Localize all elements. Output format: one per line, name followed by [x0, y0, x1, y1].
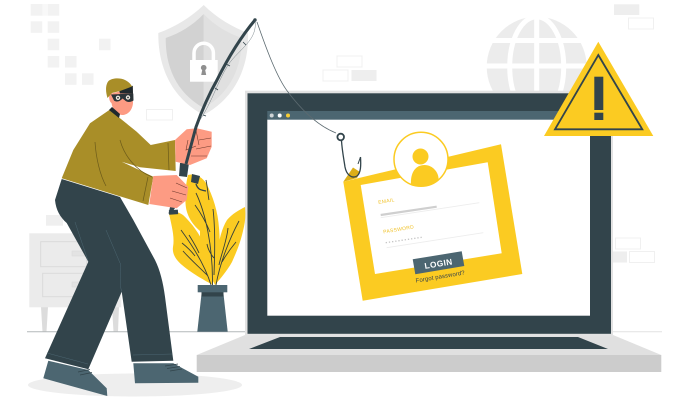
card white panel: [361, 162, 502, 274]
ground shadow: [28, 374, 242, 396]
lower hand: [149, 175, 188, 208]
rod handle: [179, 163, 189, 177]
mask: [111, 94, 134, 102]
login button: [413, 251, 464, 274]
profile avatar: [394, 132, 448, 186]
front shoe: [43, 361, 107, 396]
icon: shield with padlock: [158, 5, 248, 115]
login card: [343, 132, 522, 301]
fishing line: [257, 22, 336, 133]
laptop base front: [197, 355, 661, 372]
laptop bezel: [248, 93, 611, 334]
reel: [191, 174, 200, 184]
forgot password link: Forgot password?: [415, 270, 466, 285]
icon: fish hook: [337, 134, 361, 177]
floor line: [27, 331, 246, 333]
sweater folds: [95, 140, 169, 201]
vase: [197, 292, 228, 332]
background: drawer cabinet: [29, 215, 121, 332]
fishing rod: [186, 20, 255, 164]
hair: [119, 86, 133, 94]
face and head: [109, 88, 133, 115]
background: brick rectangles: [146, 4, 654, 263]
back shoe: [133, 363, 198, 383]
laptop keyboard: [249, 337, 608, 349]
laptop: [197, 91, 661, 372]
upper hand: [175, 128, 212, 165]
browser title bar: [267, 111, 590, 120]
laptop lid: [245, 91, 613, 337]
plant leaves: [169, 174, 245, 285]
shoe laces: [78, 364, 182, 375]
beanie: [106, 78, 132, 98]
email field: [378, 197, 479, 218]
plant leaf veins: [181, 180, 239, 285]
icon: globe: [484, 14, 590, 119]
password field: [383, 224, 483, 248]
sweater: [62, 110, 176, 205]
thief character: [43, 18, 257, 396]
laptop base deck: [197, 335, 661, 355]
password field: PASSWORD: [383, 224, 415, 235]
card frame: [343, 144, 522, 301]
rod guide line: [200, 20, 255, 120]
card fold: [343, 168, 360, 182]
background: pixel squares: [31, 4, 111, 85]
email field: EMAIL: [378, 197, 395, 206]
warning triangle: [544, 42, 653, 136]
login button: LOGIN: [424, 256, 453, 271]
plant with vase: [169, 174, 245, 332]
trousers: [45, 179, 173, 369]
laptop screen: [267, 120, 590, 316]
